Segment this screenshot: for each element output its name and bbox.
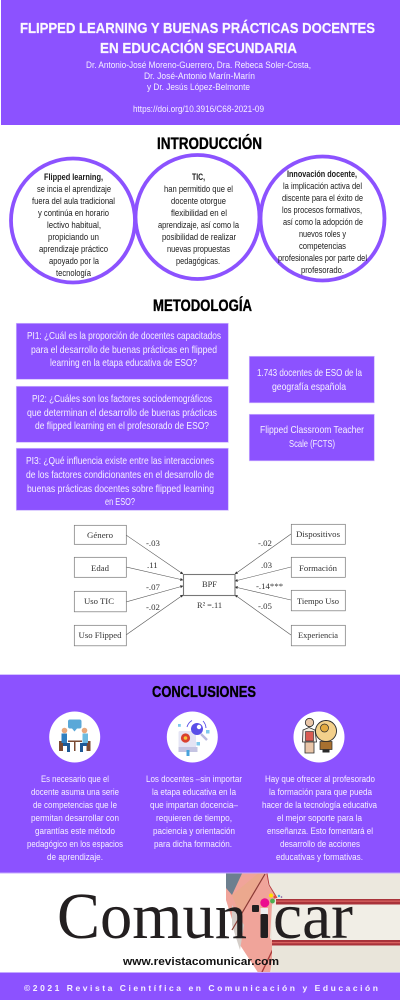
text: conclusion 2: paciencia y orientación bbox=[153, 826, 235, 837]
panel: question PI1: para el desarrollo de buenas prácticas en flipped bbox=[31, 345, 217, 356]
text: conclusion 1: garantías este método bbox=[35, 826, 115, 837]
panel: circle TIC: nuevas propuestas bbox=[167, 244, 230, 255]
chart: path diagram: Experiencia bbox=[298, 630, 338, 640]
panel: circle TIC: TIC, bbox=[192, 172, 205, 182]
panel: circle innovación docente: los procesos formativos, bbox=[282, 205, 362, 216]
panel: circle flipped learning: se incia el aprendizaje bbox=[37, 184, 111, 195]
panel: circle flipped learning: y continúa en horario bbox=[38, 208, 109, 219]
panel: circle innovación docente: nuevos roles y bbox=[299, 229, 346, 240]
chart: path diagram: Uso Flipped bbox=[78, 630, 122, 640]
panel: footer bbox=[0, 972, 400, 1000]
chart: path diagram: Dispositivos bbox=[296, 529, 341, 539]
panel: question PI2: de flipped learning en el profesorado de ESO? bbox=[35, 421, 209, 432]
authors: Dr. José-Antonio Marín-Marín bbox=[144, 71, 255, 81]
chart: path diagram: Género bbox=[87, 530, 114, 540]
chart: path diagram: Edad bbox=[91, 563, 110, 573]
doi link: https://doi.org/10.3916/C68-2021-09 bbox=[133, 104, 264, 114]
panel: circle TIC: pedagógicas. bbox=[176, 256, 220, 267]
text: conclusion 3: Hay que ofrecer al profesorado bbox=[265, 774, 375, 785]
panel: circle innovación docente: profesorado. bbox=[301, 265, 344, 276]
panel: sample: 1.743 docentes de ESO de la bbox=[257, 368, 362, 379]
logo: Comunicar bbox=[57, 880, 353, 953]
authors: y Dr. Jesús López-Belmonte bbox=[147, 82, 250, 92]
chart: path diagram: -.02 bbox=[146, 602, 160, 612]
panel: question PI3: buenas prácticas docentes sobre flipped learning bbox=[27, 484, 214, 495]
panel: circle TIC: docente otorgue bbox=[171, 196, 226, 207]
text: conclusion 1: Es necesario que el bbox=[41, 774, 109, 785]
chart: path diagram: -.02 bbox=[258, 538, 272, 548]
panel: circle innovación docente: Innovación docente, bbox=[287, 169, 357, 179]
panel: circle TIC bbox=[136, 155, 260, 279]
chart: path diagram: -.07 bbox=[146, 582, 161, 592]
panel: circle flipped learning: fuera del aula tradicional bbox=[32, 196, 115, 207]
text: conclusion 2: Los docentes –sin importar bbox=[146, 774, 243, 785]
website url: www.revistacomunicar.com bbox=[122, 956, 279, 968]
logo: Comunicar: Comun bbox=[57, 880, 247, 953]
panel: sample bbox=[249, 356, 374, 403]
text: conclusion 1: permitan desarrollar con bbox=[31, 813, 119, 824]
panel: circle flipped learning: apoyado por la bbox=[49, 256, 100, 267]
logo: Comunicar: i bbox=[255, 880, 273, 953]
panel: instrument bbox=[249, 414, 374, 461]
panel: circle flipped learning: aprendizaje práctico bbox=[39, 244, 108, 255]
panel: circle flipped learning: Flipped learning, bbox=[44, 172, 103, 182]
text: conclusion 2: que impartan docencia– bbox=[150, 800, 239, 811]
icon: teacher and light bulb bbox=[294, 712, 344, 762]
panel: question PI1: learning en la etapa educativa de ESO? bbox=[50, 358, 197, 369]
authors bbox=[86, 60, 311, 92]
panel: instrument: Scale (FCTS) bbox=[289, 439, 335, 450]
panel: question PI3: en ESO? bbox=[105, 497, 135, 508]
chart: path diagram: R² =.11 bbox=[197, 600, 222, 610]
text: conclusion 2 bbox=[146, 774, 243, 850]
heading: introducción: INTRODUCCIÓN bbox=[157, 134, 262, 153]
chart: path diagram bbox=[74, 524, 345, 646]
text: conclusion 2: requieren de tiempo, bbox=[156, 813, 232, 824]
title: EN EDUCACIÓN SECUNDARIA bbox=[100, 39, 297, 57]
panel: question PI2 bbox=[16, 386, 228, 442]
chart: path diagram: Tiempo Uso bbox=[297, 596, 340, 606]
panel: sample: geografía española bbox=[272, 382, 346, 393]
text: conclusion 1 bbox=[27, 774, 123, 863]
text: conclusion 3: hacer de la tecnología educativa bbox=[262, 800, 378, 811]
authors: Dr. Antonio-José Moreno-Guerrero, Dra. Rebeca Soler-Costa, bbox=[86, 60, 311, 70]
panel: circle TIC: han permitido que el bbox=[164, 184, 233, 195]
panel: circle innovación docente: profesionales por parte del bbox=[278, 253, 367, 264]
panel: circle TIC: aprendizaje, así como la bbox=[158, 220, 240, 231]
panel: circle innovación docente: la implicación activa del bbox=[283, 181, 362, 192]
panel: circle flipped learning: propiciando un bbox=[48, 232, 99, 243]
panel: question PI3: PI3: ¿Qué influencia existe entre las interacciones bbox=[26, 456, 214, 467]
chart: path diagram: Formación bbox=[299, 563, 338, 573]
chart: path diagram: Uso TIC bbox=[84, 596, 114, 606]
panel: circle flipped learning: lectivo habitual, bbox=[47, 220, 101, 231]
panel: circle flipped learning bbox=[11, 158, 135, 282]
text: conclusion 3: enseñanza. Esto fomentará el bbox=[267, 826, 373, 837]
panel: instrument: Flipped Classroom Teacher bbox=[260, 425, 364, 436]
chart: path diagram: -.14*** bbox=[256, 581, 283, 591]
chart: path diagram: .03 bbox=[261, 560, 273, 570]
text: conclusion 3 bbox=[262, 774, 378, 863]
text: conclusion 1: de aprendizaje. bbox=[47, 852, 103, 863]
panel: circle flipped learning: tecnología bbox=[56, 268, 92, 279]
panel: conclusiones bbox=[0, 674, 400, 874]
panel: question PI1 bbox=[16, 323, 228, 379]
chart: path diagram: BPF bbox=[202, 579, 217, 589]
panel: question PI2: PI2: ¿Cuáles son los factores sociodemográficos bbox=[32, 394, 212, 405]
panel: question PI2: que determinan el desarrollo de buenas prácticas bbox=[27, 408, 217, 419]
logo: Comunicar: car bbox=[273, 880, 353, 953]
image: stack of books bbox=[226, 874, 400, 972]
panel: circle innovación docente: así como la adopción de bbox=[283, 217, 363, 228]
heading: conclusiones: CONCLUSIONES bbox=[152, 684, 256, 701]
text: conclusion 3: desarrollo de acciones bbox=[280, 839, 360, 850]
panel: circle TIC: flexibilidad en el bbox=[171, 208, 227, 219]
chart: path diagram: .11 bbox=[147, 560, 158, 570]
text: conclusion 1: de competencias que le bbox=[33, 800, 117, 811]
panel: circle innovación docente bbox=[260, 156, 384, 280]
text: conclusion 2: para dicha formación. bbox=[154, 839, 232, 850]
text: conclusion 1: docente asuma una serie bbox=[31, 787, 119, 798]
title bbox=[20, 20, 375, 57]
icon: book and magnifier bbox=[167, 712, 218, 762]
text: conclusion 3: la formación para que pueda bbox=[269, 787, 373, 798]
panel: circle TIC: posibilidad de realizar bbox=[162, 232, 237, 243]
icon: two people talking bbox=[49, 712, 100, 762]
text: conclusion 1: pedagógico en los espacios bbox=[27, 839, 123, 850]
panel: question PI3: de los factores condicionantes en el desarrollo de bbox=[26, 470, 214, 481]
panel: footer: ©2021 Revista Científica en Comunicación y Educación bbox=[24, 983, 378, 993]
panel: question PI1: PI1: ¿Cuál es la proporción de docentes capacitados bbox=[27, 331, 221, 342]
chart: path diagram: -.05 bbox=[258, 601, 273, 611]
heading: metodología: METODOLOGÍA bbox=[153, 296, 252, 315]
text: conclusion 2: la etapa educativa en la bbox=[152, 787, 237, 798]
panel: question PI3 bbox=[16, 448, 228, 510]
text: conclusion 3: educativas y formativas. bbox=[276, 852, 363, 863]
panel: circle innovación docente: competencias bbox=[299, 241, 346, 252]
panel: circle innovación docente: discente para el éxito de bbox=[282, 193, 363, 204]
panel: header bbox=[1, 0, 400, 125]
text: conclusion 3: el mejor soporte para la bbox=[277, 813, 363, 824]
chart: path diagram: -.03 bbox=[146, 538, 161, 548]
